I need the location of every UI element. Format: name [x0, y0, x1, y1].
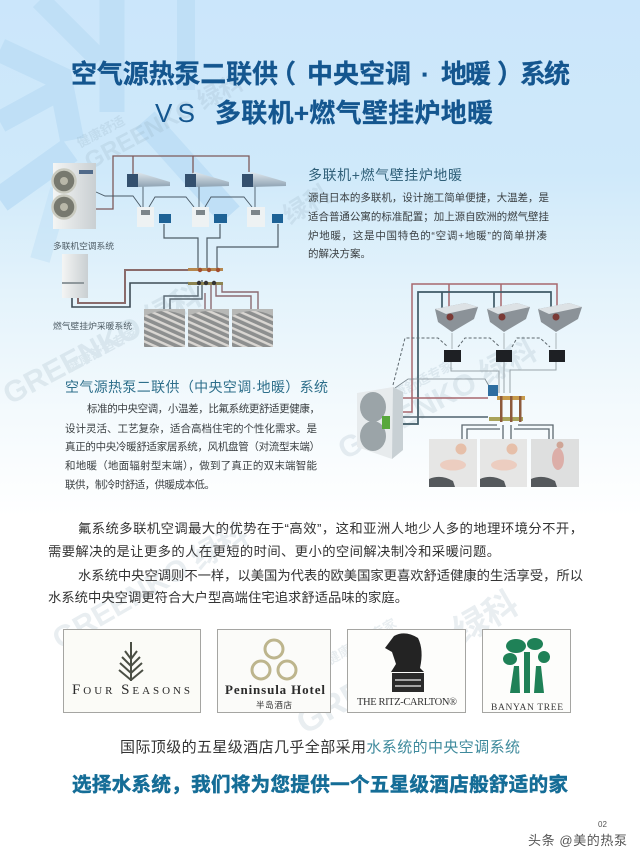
body: 标准的中央空调，小温差，比氟系统更舒适更健康，	[87, 402, 320, 415]
refrigerant and control wiring	[72, 156, 278, 309]
watermarks: GREENKO 绿科	[0, 279, 208, 411]
body: 设计灵活、工艺复杂，适合高档住宅的个性化需求。是	[65, 422, 318, 435]
page number: 02	[598, 820, 607, 829]
watermarks	[0, 69, 543, 742]
logo: The Ritz-Carlton: THE RITZ-CARLTON®	[357, 697, 457, 708]
paragraphs: VRF versus water system: 水系统中央空调更符合大户型高端住宅追求舒适品味的家庭。	[48, 589, 408, 605]
title: 中央空调	[307, 59, 411, 89]
snowflake background pattern	[0, 0, 230, 260]
pipes and wiring	[393, 284, 557, 439]
body: 和地暖（地面辐射型末端），做到了真正的双末端智能	[65, 459, 318, 472]
icon: gas wall boiler	[62, 254, 88, 298]
body	[65, 402, 320, 491]
body: 真正的中央冷暖舒适家居系统，风机盘管（对流型末端）	[65, 440, 320, 453]
icons: indoor fan coil units	[435, 303, 582, 332]
heading: 多联机+燃气壁挂炉地暖	[308, 167, 462, 183]
floor heating images	[144, 309, 273, 347]
icon: VRF outdoor unit	[52, 163, 96, 229]
watermarks: 健康舒适专家	[379, 358, 455, 408]
logo: Peninsula Hotel: 半岛酒店	[256, 700, 292, 710]
diagram: VRF plus gas boiler system	[52, 156, 286, 347]
paragraphs: VRF versus water system: 水系统中央空调则不一样，以美国为代表的欧美国家更喜欢舒适健康的生活享受，所以	[78, 567, 583, 583]
logo: Peninsula Hotel	[218, 630, 330, 712]
logo: The Ritz-Carlton	[348, 630, 466, 712]
watermarks: 健康舒适专家	[324, 616, 399, 668]
icons: black thermostats	[444, 350, 565, 362]
heading: 空气源热泵二联供（中央空调·地暖）系统	[65, 379, 328, 395]
logo: Four Seasons	[64, 630, 200, 712]
title	[71, 59, 570, 128]
body: 炉地暖，这是中国特色的“空调+地暖”的简单拼凑	[308, 229, 548, 242]
watermarks: GREENKO 绿科	[47, 517, 254, 656]
icon: heat pump outdoor unit	[357, 387, 403, 459]
logo: Four Seasons: F OUR S EASONS	[72, 682, 190, 698]
paragraphs: VRF versus water system: 氟系统多联机空调最大的优势在于“高效”，这和亚洲人地少人多的地理环境分不开，	[78, 520, 583, 536]
baby photos	[429, 439, 579, 487]
body: 联供，制冷时舒适，供暖成本低。	[65, 478, 215, 491]
title: 地暖	[441, 59, 491, 89]
caption: hotels: 国际顶级的五星级酒店几乎全部采用水系统的中央空调系统	[120, 738, 520, 756]
body	[308, 191, 550, 260]
body: 的解决方案。	[308, 247, 371, 260]
title: ）	[497, 59, 523, 89]
diagram: air source heat pump system	[357, 284, 582, 487]
title: 系统	[520, 59, 570, 89]
logo: Banyan Tree	[482, 630, 570, 713]
icons: wall controllers	[137, 207, 283, 227]
title: VS	[155, 98, 195, 128]
body: 源自日本的多联机，设计施工简单便捷，大温差，是	[308, 191, 550, 204]
text block: air source heat pump	[65, 379, 328, 491]
logo: Peninsula Hotel: Peninsula Hotel	[225, 682, 325, 697]
logo: Banyan Tree: BANYAN TREE	[491, 703, 563, 713]
icon: manifold	[188, 268, 223, 285]
watermarks: GREENKO 绿科	[290, 584, 525, 742]
title: ·	[421, 59, 430, 89]
paragraphs: VRF versus water system: 需要解决的是让更多的人在更短的时间、更小的空间解决制冷和采暖问题。	[48, 543, 500, 559]
source credit: 头条 @美的热泵	[528, 833, 627, 848]
hotel logos	[64, 630, 570, 713]
paragraphs: VRF versus water system	[48, 520, 583, 605]
label: gas boiler heating system: 燃气壁挂炉采暖系统	[53, 320, 132, 331]
body: 适合普通公寓的标准配置；加上源自欧洲的燃气壁挂	[308, 210, 550, 223]
icons: indoor ducted units	[127, 172, 286, 187]
watermarks: GREENKO 绿科	[333, 334, 543, 466]
text block: VRF plus gas boiler	[308, 167, 550, 260]
title: （	[270, 59, 296, 89]
title: 多联机+燃气壁挂炉地暖	[215, 98, 493, 128]
watermarks: GREENKO 绿科	[80, 69, 248, 175]
watermarks: 健康舒适专家	[64, 325, 140, 375]
watermarks: 健康舒适	[74, 113, 127, 151]
label: VRF system: 多联机空调系统	[53, 240, 114, 251]
icon: manifold and pump	[488, 385, 525, 422]
watermarks: 绿科	[278, 180, 336, 230]
title: 空气源热泵二联供	[71, 59, 278, 89]
slogan: 选择水系统，我们将为您提供一个五星级酒店般舒适的家	[72, 773, 568, 796]
